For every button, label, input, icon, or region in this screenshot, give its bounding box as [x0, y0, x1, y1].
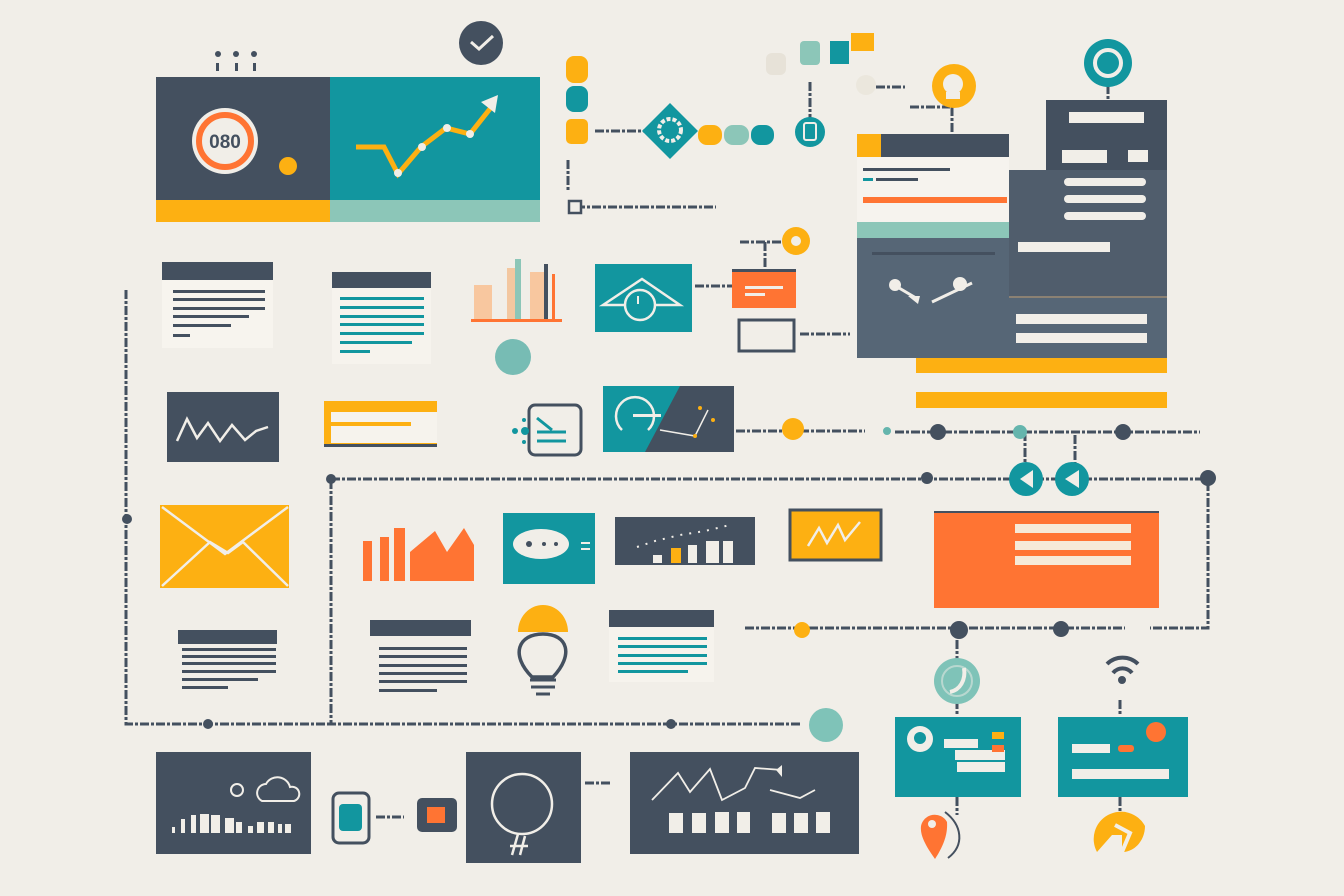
- teal card right: [1058, 717, 1188, 797]
- yellow form card: [324, 401, 437, 447]
- process flow: [566, 56, 825, 213]
- dark bar chart panel: [615, 517, 755, 565]
- icon: yellow coin: [782, 227, 810, 255]
- split gauge card: [603, 386, 734, 452]
- icon: lightbulb: [518, 605, 568, 694]
- text card teal: [609, 610, 714, 682]
- icon: tablet: [333, 793, 369, 843]
- yellow bars: [916, 358, 1167, 408]
- orange bar area chart: [363, 528, 474, 581]
- top colour squares: [766, 33, 876, 95]
- envelope icon: [160, 505, 289, 588]
- orange tag card: [732, 269, 796, 308]
- icon: yellow hand: [1094, 812, 1145, 852]
- yellow chart panel: [790, 510, 881, 560]
- icon: orange pin: [921, 812, 959, 859]
- browser window card: [857, 134, 1009, 222]
- dashboard card: gauge: [156, 77, 330, 222]
- icon: wifi: [1107, 658, 1138, 682]
- large slate card: [857, 222, 1167, 358]
- icon: gauge: 080: [209, 132, 241, 153]
- orange callout panel: [934, 511, 1159, 608]
- dark cloud chart panel: [156, 752, 311, 854]
- teal house icon panel: [595, 264, 692, 332]
- text card 1: [162, 262, 273, 348]
- teal circle: [495, 339, 531, 375]
- wide analytics panel: [630, 752, 859, 854]
- dots icon: [215, 51, 257, 71]
- mini line chart: [167, 392, 279, 462]
- timeline nodes: [122, 418, 1216, 742]
- teal oval panel: [503, 513, 595, 584]
- right dark text panel: [1009, 100, 1167, 298]
- text block 4: [370, 620, 471, 692]
- outlined box: [739, 320, 794, 351]
- teal card left: [895, 717, 1021, 797]
- connector lines: [126, 82, 1208, 817]
- icon: check badge: [459, 21, 503, 65]
- magnifier panel: [466, 752, 581, 863]
- icon: tag box: [417, 798, 457, 832]
- icon: gauge: [192, 108, 258, 174]
- node icon: [512, 405, 581, 455]
- icon: person badge: [932, 64, 976, 108]
- icon: leaf badge: [934, 658, 980, 704]
- line chart panel: [330, 77, 540, 222]
- text block 3: [178, 630, 277, 689]
- text card 2: [332, 272, 431, 364]
- icon: target ring: [1084, 39, 1132, 87]
- bar chart books: [471, 259, 562, 322]
